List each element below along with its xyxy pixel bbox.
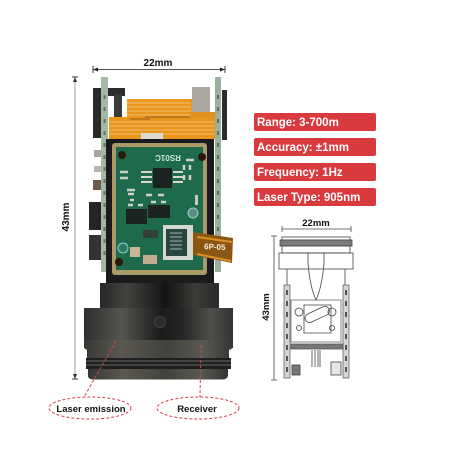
side connectors: [89, 88, 227, 260]
silkscreen text: RS01C: [155, 153, 181, 162]
housing neck: [100, 283, 219, 309]
drawing width: 22mm: 22mm: [302, 218, 330, 229]
callout: laser emission: Laser emission: [56, 404, 126, 415]
callout: receiver: Receiver: [177, 404, 217, 415]
label: range: Range: 3-700m: [257, 117, 339, 129]
FPC connector: [163, 225, 193, 260]
flex tail 6P-05: [193, 232, 233, 263]
barrel threads: [86, 358, 231, 369]
orange ribbon cable: [109, 99, 215, 139]
label: laser type: Laser Type: 905nm: [257, 192, 360, 204]
callout: laser emission: [49, 341, 131, 419]
right side board: [215, 77, 221, 272]
spec labels: [254, 113, 376, 206]
drawing height: 43mm: [261, 236, 277, 380]
drawing: mount plate: [291, 300, 341, 342]
lens barrel flange: [84, 308, 233, 342]
drawing height: 43mm: 43mm: [261, 293, 272, 321]
camera block: [192, 87, 210, 113]
drawing: side boards: [284, 285, 349, 378]
black housing: [106, 139, 214, 285]
mounting screw hole: [154, 316, 166, 328]
barrel collar: [84, 340, 233, 358]
flex tail 6P-05: 6P-05: [204, 242, 226, 252]
width dimension: 22mm: 22mm: [144, 58, 173, 69]
technical drawing: [261, 218, 353, 380]
label: accuracy: Accuracy: ±1mm: [257, 142, 349, 154]
laser module photo: [84, 77, 233, 380]
green circuit board: [112, 143, 207, 275]
callout: receiver: [157, 345, 239, 419]
chip: [153, 168, 172, 188]
drawing: lens barrel: [279, 237, 353, 301]
barrel base: [88, 369, 228, 380]
width dimension: 22mm: [93, 58, 225, 73]
height dimension: 43mm: 43mm: [61, 202, 72, 231]
label: frequency: Frequency: 1Hz: [257, 167, 343, 179]
left side board: [101, 77, 108, 272]
height dimension: 43mm: [61, 77, 78, 379]
drawing width: 22mm: [282, 218, 351, 232]
